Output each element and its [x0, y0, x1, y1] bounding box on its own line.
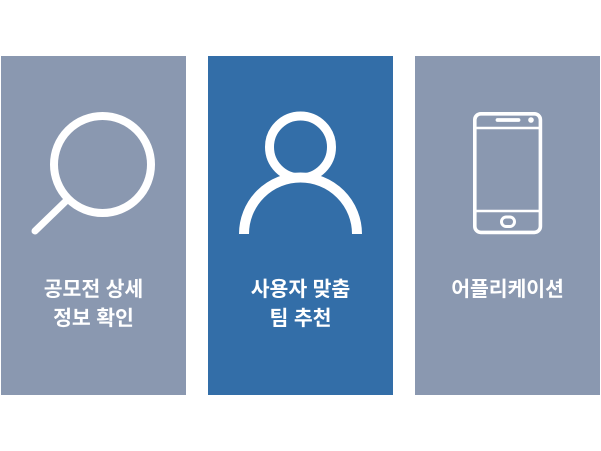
heading: contest details: 정보 확인 [53, 307, 134, 330]
icon: smartphone [473, 112, 542, 234]
icon: user [239, 112, 362, 234]
heading: application: 어플리케이션 [451, 278, 564, 301]
icon: magnifying glass [32, 112, 155, 234]
panel: application [415, 56, 600, 395]
panel: team recommendation [208, 56, 393, 395]
heading: team recommendation [251, 278, 350, 330]
heading: team recommendation: 팀 추천 [270, 307, 331, 330]
heading: contest details: 공모전 상세 [44, 278, 143, 301]
heading: team recommendation: 사용자 맞춤 [251, 278, 350, 301]
panel: contest details [1, 56, 186, 395]
heading: contest details [44, 278, 143, 330]
